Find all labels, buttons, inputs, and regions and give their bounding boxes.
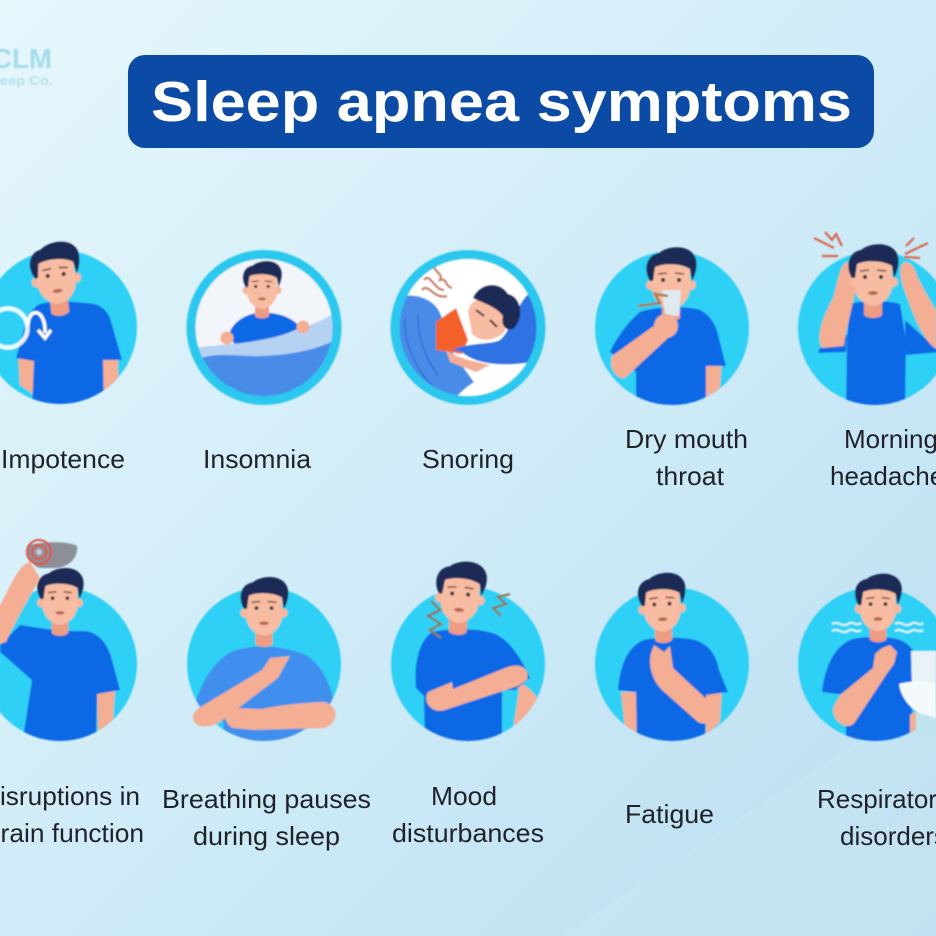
label: Impotence xyxy=(1,444,125,474)
label xyxy=(817,784,936,851)
label xyxy=(0,781,144,848)
illustration: breathing pauses xyxy=(187,577,341,745)
panel: morning headache xyxy=(798,232,936,491)
illustration: dry mouth xyxy=(595,247,749,412)
illustration: mood disturbances xyxy=(391,560,545,745)
panel: respiratory disorders xyxy=(798,574,936,851)
label: throat xyxy=(656,461,725,491)
illustration: respiratory disorders xyxy=(798,574,936,745)
panel: snoring xyxy=(380,254,546,474)
panel: fatigue xyxy=(595,572,749,829)
panel: mood disturbances xyxy=(391,560,545,848)
title: Sleep apnea symptoms xyxy=(151,70,852,134)
logo xyxy=(0,43,53,88)
panel: insomnia xyxy=(185,254,345,474)
illustration: snoring xyxy=(380,254,546,404)
panel: dry mouth throat xyxy=(595,247,749,491)
label xyxy=(162,784,371,851)
label: Breathing pauses xyxy=(162,784,371,814)
label: disturbances xyxy=(392,818,544,848)
label: Snoring xyxy=(422,444,514,474)
label xyxy=(625,424,748,491)
label: Morning xyxy=(844,424,936,454)
label: during sleep xyxy=(193,821,340,851)
label: Fatigue xyxy=(625,799,714,829)
panel: impotence xyxy=(0,239,137,474)
illustration: morning headache xyxy=(798,232,936,412)
illustration: impotence xyxy=(0,239,137,410)
illustration: fatigue xyxy=(595,572,749,745)
panel: disruptions in brain function xyxy=(0,540,144,848)
label: Dry mouth xyxy=(625,424,748,454)
label xyxy=(392,781,544,848)
label xyxy=(830,424,936,491)
illustration: insomnia xyxy=(185,254,345,420)
illustration: brain disruption xyxy=(0,540,137,745)
label: Insomnia xyxy=(203,444,312,474)
label: Mood xyxy=(431,781,497,811)
panel: breathing pauses during sleep xyxy=(162,577,371,851)
title xyxy=(128,55,874,148)
